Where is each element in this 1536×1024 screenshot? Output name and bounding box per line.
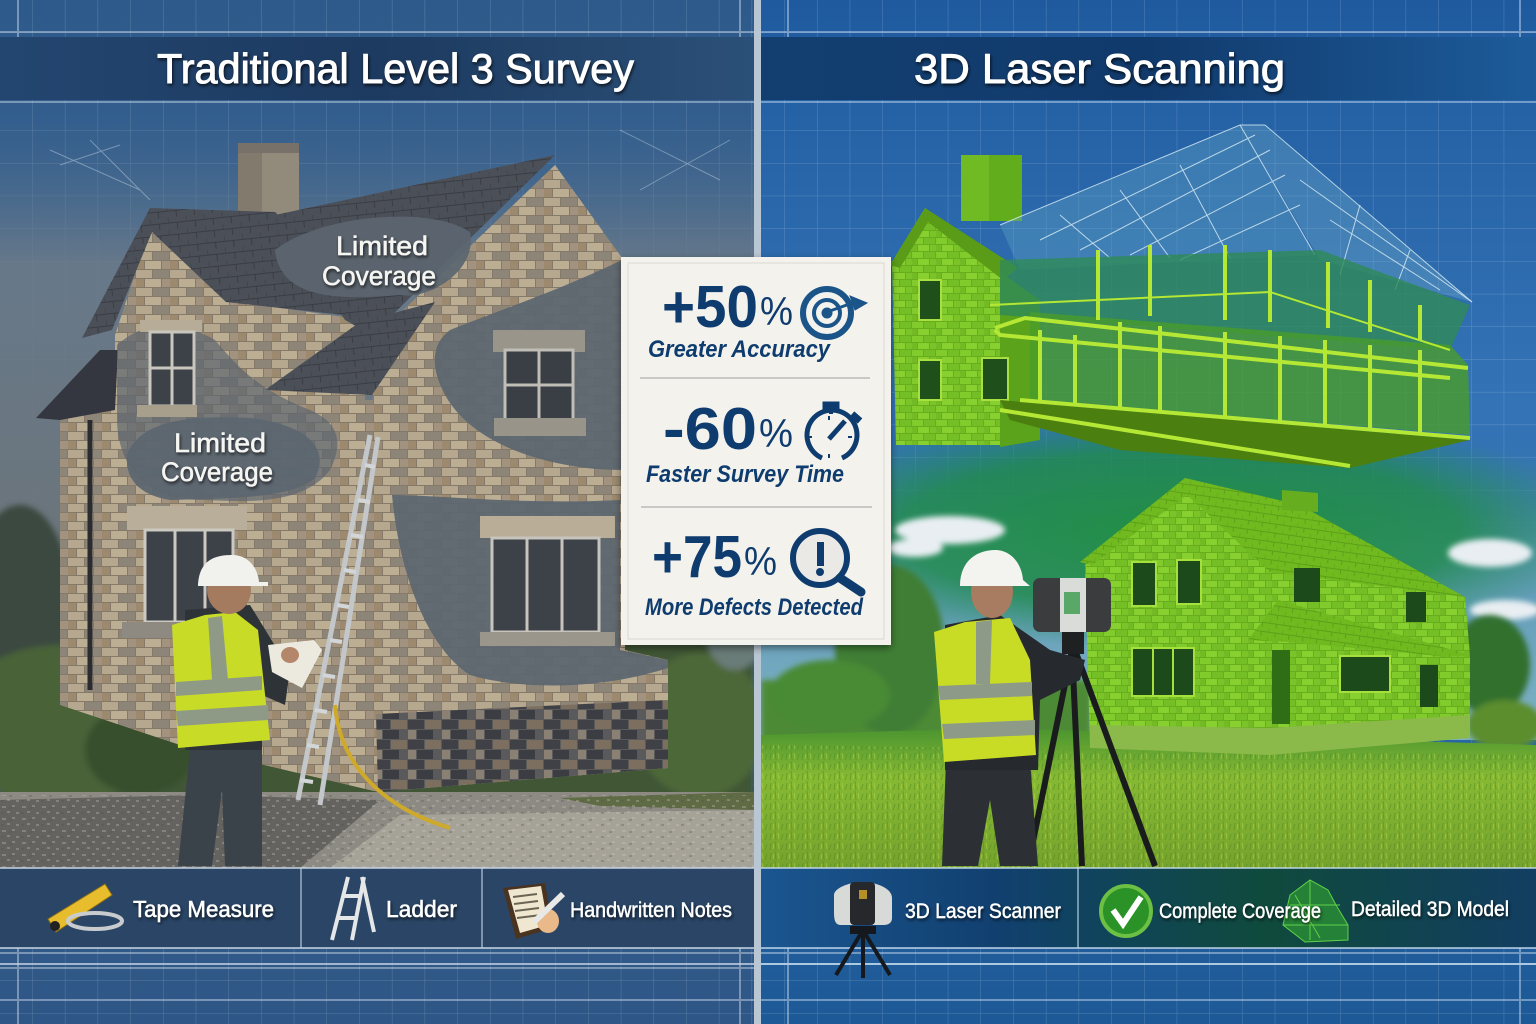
stat: more defects detected: +75 (652, 524, 742, 590)
ladder label: Ladder (386, 896, 457, 922)
window lower right (480, 516, 615, 646)
divider (640, 378, 872, 507)
stat: more defects detected: % (744, 540, 777, 584)
gable roof (82, 208, 362, 338)
main roof (275, 155, 555, 335)
small gable wall (115, 228, 365, 400)
right gable wall (372, 165, 668, 792)
icon: stopwatch (807, 402, 860, 458)
header band (0, 37, 754, 100)
panel: 3d laser scanning (750, 0, 1536, 1024)
trees (761, 565, 1536, 750)
limited coverage labels (161, 231, 436, 487)
stat: greater accuracy (648, 274, 867, 363)
tape measure label: Tape Measure (133, 896, 274, 922)
grey uncovered patches (117, 217, 668, 685)
operator (934, 550, 1085, 866)
surveyor with clipboard (172, 555, 322, 866)
ladder (298, 435, 378, 805)
heading: 3d laser scanning: 3D Laser Scanning (914, 45, 1285, 92)
stat: faster survey time: -60 (663, 396, 757, 462)
clouds (887, 516, 1536, 620)
stat: greater accuracy: % (760, 290, 793, 334)
lower left wall (60, 400, 380, 792)
window lower left (122, 506, 247, 638)
blueprint sketch lines (50, 130, 730, 200)
real green house (1080, 478, 1470, 755)
3d model wireframe house (890, 125, 1472, 468)
chimney (238, 143, 299, 230)
detailed 3d model label: Detailed 3D Model (1351, 898, 1509, 921)
grass field (761, 728, 1536, 868)
window upper (137, 320, 202, 417)
complete coverage label: Complete Coverage (1159, 900, 1321, 923)
wire roof (1000, 125, 1315, 270)
ground (0, 792, 754, 868)
tools bar (761, 868, 1536, 978)
icon: target with arrow (803, 289, 867, 337)
window right upper (493, 330, 586, 436)
scanner on tripod (1028, 578, 1155, 866)
icon: 3d laser scanner (834, 882, 892, 978)
limited coverage labels: Limited (336, 231, 428, 261)
sky backdrop (0, 110, 754, 550)
stat: more defects detected (645, 524, 864, 621)
stat: faster survey time: Faster Survey Time (646, 461, 844, 488)
icon: magnifier with exclamation (793, 531, 861, 592)
panel: traditional level 3 survey (0, 0, 765, 1024)
header band (761, 37, 1536, 100)
stat: faster survey time: % (759, 412, 793, 456)
handwritten notes label: Handwritten Notes (570, 899, 732, 922)
icon: tape measure (48, 884, 122, 932)
floors (1000, 250, 1470, 350)
stat: more defects detected: More Defects Detected (645, 594, 864, 621)
lower sky (761, 440, 1536, 740)
icon: ladder (332, 877, 374, 940)
trees and bushes (0, 505, 765, 805)
stat: greater accuracy: Greater Accuracy (648, 336, 832, 363)
panel: statistics card (621, 257, 891, 645)
stat: faster survey time (646, 396, 860, 488)
yellow cable (335, 705, 450, 828)
stat: greater accuracy: +50 (662, 274, 758, 340)
solid green section (892, 208, 1000, 445)
limited coverage labels: Limited (174, 428, 266, 458)
tools bar (0, 868, 754, 964)
icon: detailed 3d model (1283, 880, 1348, 942)
3d laser scanner label: 3D Laser Scanner (905, 900, 1061, 923)
center divider (754, 0, 761, 1024)
icon: handwritten notes (503, 883, 563, 939)
limited coverage labels: Coverage (322, 261, 436, 291)
surveyed house (36, 155, 668, 792)
heading: traditional level 3 survey: Traditional Level 3 Survey (157, 45, 634, 92)
green glow (750, 410, 1536, 650)
icon: complete coverage check (1101, 886, 1151, 936)
limited coverage labels: Coverage (161, 457, 273, 487)
base dark course (376, 700, 668, 792)
